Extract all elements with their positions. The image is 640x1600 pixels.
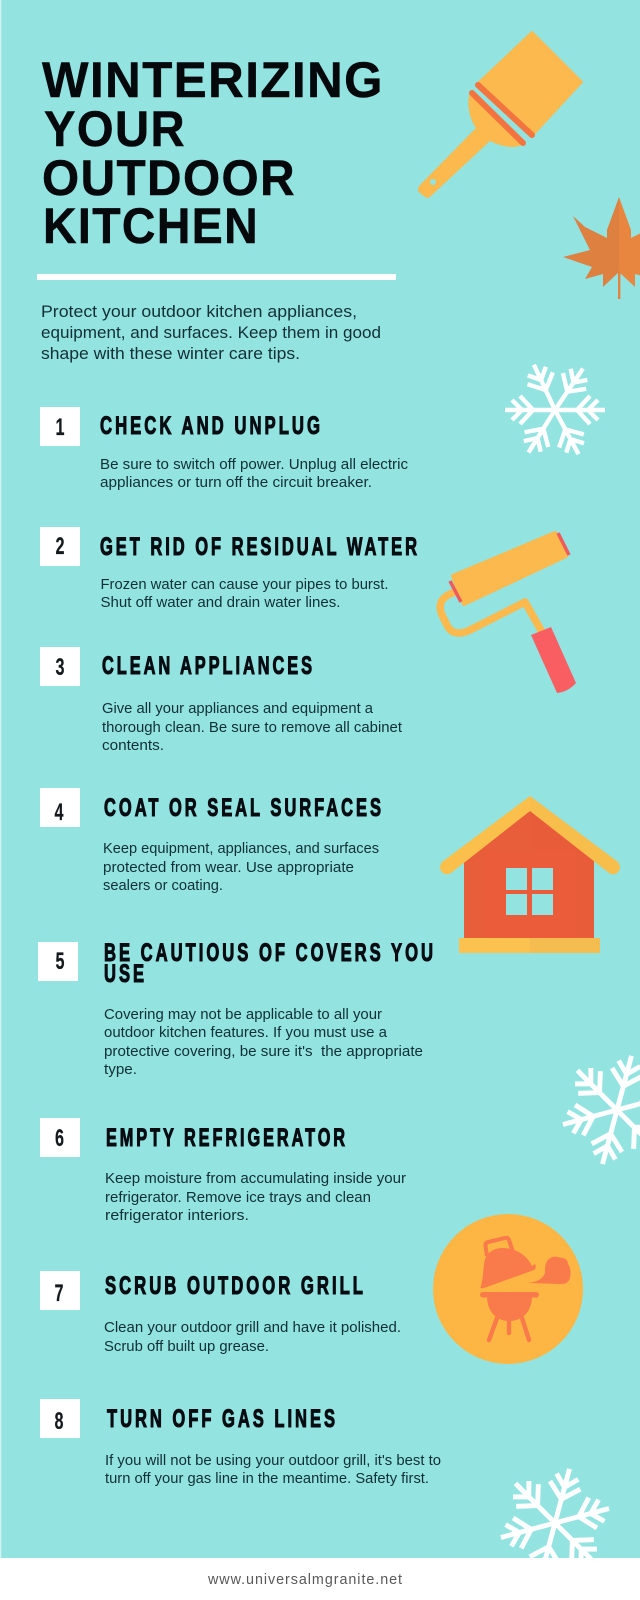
description 4: Keep equipment, appliances, and surfaces (103, 841, 379, 857)
icon: maple leaf (563, 197, 640, 299)
title: OUTDOOR (42, 150, 296, 206)
description 2 (100, 577, 388, 611)
description 1: Be sure to switch off power. Unplug all electric (100, 457, 408, 473)
description 6: Keep moisture from accumulating inside your (105, 1171, 406, 1187)
description 6: refrigerator interiors. (105, 1208, 249, 1224)
step 3 (40, 647, 402, 754)
icon: paint brush (418, 32, 582, 198)
description 4: protected from wear. Use appropriate (103, 860, 354, 876)
description 5: type. (104, 1062, 137, 1078)
number badge 2 (40, 527, 80, 566)
number badge 8 (40, 1399, 80, 1438)
title underline (37, 274, 396, 280)
step 2 (40, 527, 420, 611)
heading 4: COAT OR SEAL SURFACES (104, 794, 384, 822)
description 5 (104, 1007, 423, 1078)
heading 7: SCRUB OUTDOOR GRILL (105, 1272, 366, 1300)
description 3: Give all your appliances and equipment a (102, 701, 374, 717)
title (42, 52, 384, 254)
icon: house (440, 796, 620, 953)
number badge 7: 7 (54, 1280, 64, 1307)
description 7: Scrub off built up grease. (104, 1339, 269, 1355)
title: YOUR (44, 101, 186, 157)
grill bowl (480, 1292, 539, 1340)
heading 5 (104, 939, 436, 988)
footer band (0, 1558, 640, 1600)
number badge 7 (40, 1271, 80, 1310)
description 8: turn off your gas line in the meantime. Safety first. (105, 1471, 429, 1487)
smoke puff (528, 1257, 571, 1284)
number badge 3 (40, 647, 80, 686)
step 5 (38, 939, 436, 1078)
heading 2: GET RID OF RESIDUAL WATER (100, 533, 420, 561)
footer url: www.universalmgranite.net (207, 1571, 403, 1588)
description 3: contents. (102, 738, 164, 754)
heading 1: CHECK AND UNPLUG (100, 412, 323, 440)
intro text (41, 302, 381, 363)
description 5: protective covering, be sure it's the appropriate (104, 1044, 423, 1060)
description 5: Covering may not be applicable to all your (104, 1007, 382, 1023)
number badge 6: 6 (55, 1125, 64, 1152)
intro text: Protect your outdoor kitchen appliances, (41, 302, 357, 321)
title: KITCHEN (43, 198, 259, 254)
intro text: shape with these winter care tips. (41, 344, 300, 363)
number badge 6 (40, 1118, 80, 1157)
description 7: Clean your outdoor grill and have it polished. (104, 1320, 401, 1336)
number badge 1 (40, 407, 80, 446)
intro text: equipment, and surfaces. Keep them in good (41, 323, 381, 342)
description 5: outdoor kitchen features. If you must use a (104, 1025, 388, 1041)
description 4 (103, 841, 379, 894)
icon: snowflake top (505, 359, 605, 461)
step 1 (40, 407, 408, 491)
description 3: thorough clean. Be sure to remove all cabinet (102, 720, 402, 736)
number badge 1: 1 (56, 414, 64, 441)
description 7 (104, 1320, 401, 1355)
number badge 8: 8 (54, 1408, 64, 1435)
step 8 (40, 1399, 441, 1487)
step 6 (40, 1118, 406, 1224)
description 6: refrigerator. Remove ice trays and clean (105, 1190, 371, 1206)
description 8: If you will not be using your outdoor grill, it's best to (105, 1453, 441, 1469)
description 1 (100, 457, 408, 491)
description 2: Frozen water can cause your pipes to burst. (100, 577, 388, 593)
description 2: Shut off water and drain water lines. (100, 595, 340, 611)
description 3 (102, 701, 402, 754)
heading 5: USE (104, 960, 147, 988)
number badge 4 (40, 788, 80, 827)
description 4: sealers or coating. (103, 878, 223, 894)
heading 5: BE CAUTIOUS OF COVERS YOU (104, 939, 436, 967)
icon: snowflake middle (548, 1041, 640, 1179)
description 1: appliances or turn off the circuit breaker. (100, 475, 372, 491)
number badge 5: 5 (56, 948, 64, 975)
heading 8: TURN OFF GAS LINES (107, 1405, 338, 1433)
heading 6: EMPTY REFRIGERATOR (106, 1124, 348, 1152)
number badge 3: 3 (56, 654, 64, 681)
heading 3: CLEAN APPLIANCES (102, 652, 315, 680)
step 4 (40, 788, 384, 894)
description 8 (105, 1453, 441, 1487)
step 7 (40, 1271, 401, 1355)
number badge 2: 2 (56, 533, 64, 560)
description 6 (105, 1171, 406, 1224)
title: WINTERIZING (42, 52, 384, 108)
number badge 4: 4 (54, 799, 64, 826)
grill lid (480, 1238, 536, 1288)
icon: snowflake bottom (486, 1454, 624, 1592)
icon: grill in circle (433, 1214, 583, 1364)
icon: paint roller (440, 533, 576, 693)
number badge 5 (38, 942, 78, 981)
